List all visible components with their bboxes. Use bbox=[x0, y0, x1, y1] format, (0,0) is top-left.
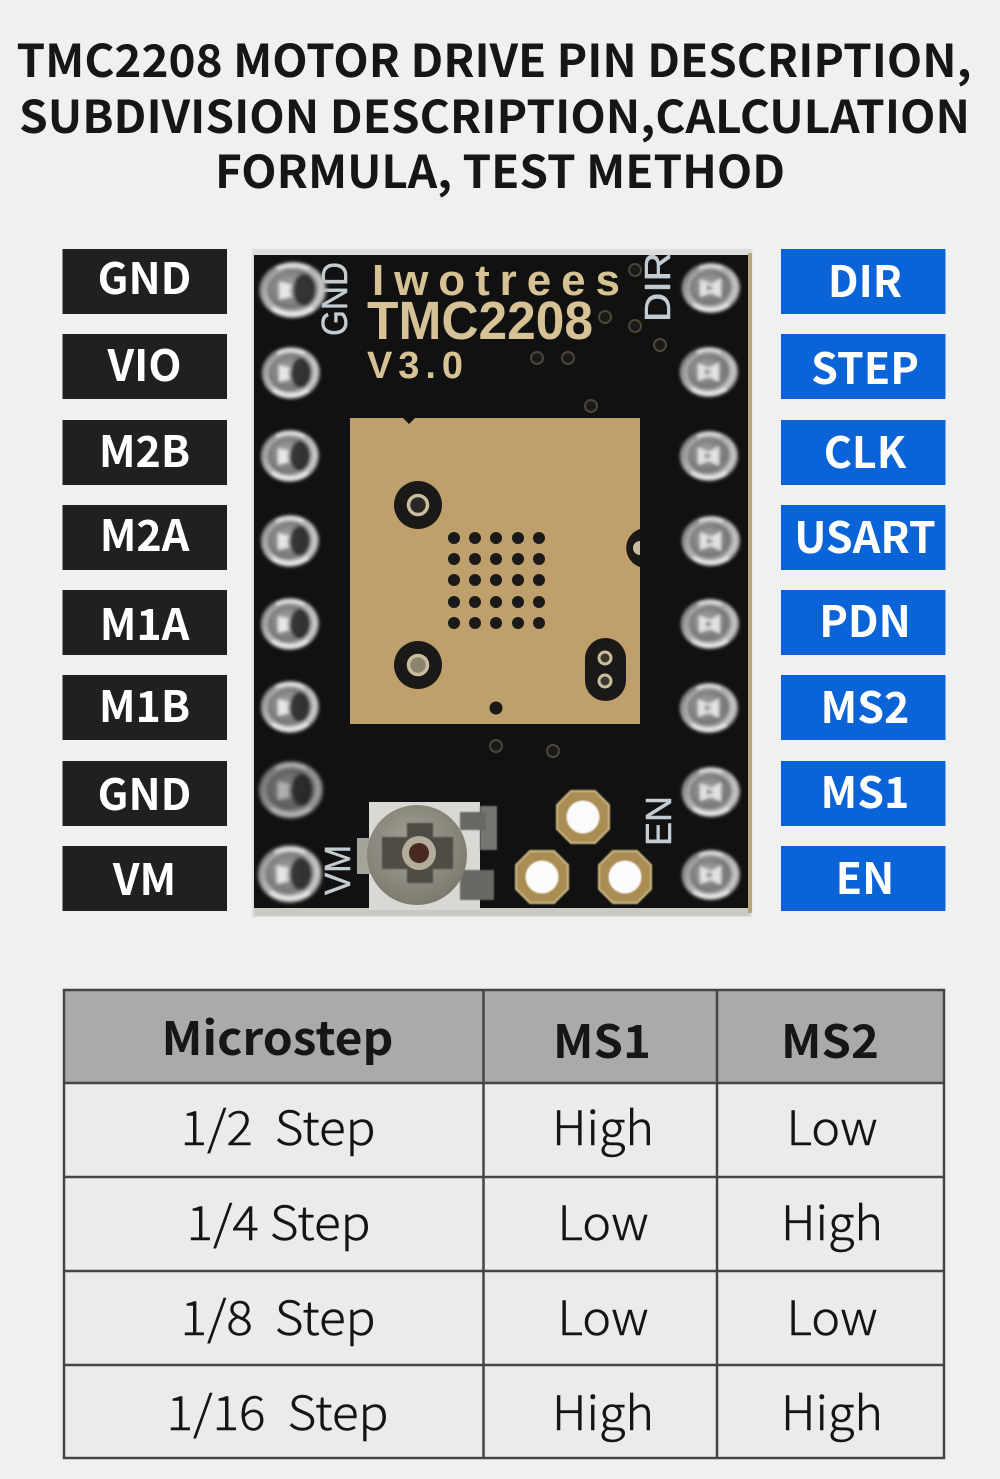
table body: High bbox=[781, 1185, 883, 1254]
right pin labels: MS2 bbox=[821, 674, 909, 736]
right pin labels: PDN bbox=[819, 588, 911, 650]
left pin labels: VM bbox=[112, 846, 176, 908]
board silkscreen text: TMC2208 bbox=[367, 291, 593, 351]
table body: Low bbox=[786, 1090, 878, 1159]
right pin labels: DIR bbox=[828, 248, 902, 310]
table header bbox=[64, 990, 944, 1083]
microstep table bbox=[64, 990, 944, 1458]
potentiometer bbox=[357, 802, 497, 910]
small vias bbox=[490, 264, 666, 757]
right pin labels: MS1 bbox=[821, 759, 909, 821]
left pin labels: GND bbox=[98, 761, 191, 823]
table body: Low bbox=[558, 1185, 648, 1254]
table body: High bbox=[552, 1375, 654, 1444]
left pin labels bbox=[62, 245, 227, 911]
table body: 1/8 Step bbox=[180, 1280, 376, 1349]
table body bbox=[64, 1083, 944, 1458]
right header pins bbox=[680, 263, 740, 900]
title: TMC2208 MOTOR DRIVE PIN DESCRIPTION, bbox=[16, 25, 972, 90]
right pin labels: STEP bbox=[811, 335, 919, 397]
left pin labels: GND bbox=[98, 245, 191, 307]
board silkscreen text: Iwotrees bbox=[372, 256, 620, 305]
table header: Microstep bbox=[162, 1003, 394, 1069]
right pin labels bbox=[781, 248, 946, 911]
through-hole pads bbox=[516, 791, 651, 903]
table body: Low bbox=[786, 1280, 878, 1349]
table body: 1/2 Step bbox=[180, 1090, 376, 1159]
gold thermal pad bbox=[350, 418, 640, 724]
board silkscreen text: GND bbox=[314, 262, 355, 336]
right pin labels: EN bbox=[836, 845, 894, 907]
left header pins bbox=[258, 262, 326, 903]
table body: 1/16 Step bbox=[166, 1375, 388, 1444]
right pin labels: USART bbox=[794, 504, 936, 566]
table body: 1/4 Step bbox=[186, 1185, 370, 1254]
table header: MS1 bbox=[553, 1006, 651, 1072]
board silkscreen text: VM bbox=[317, 845, 358, 895]
title bbox=[16, 25, 972, 201]
table header: MS2 bbox=[781, 1006, 879, 1072]
title: FORMULA, TEST METHOD bbox=[215, 136, 785, 201]
left pin labels: M1A bbox=[100, 591, 190, 653]
left pin labels: M2B bbox=[99, 418, 190, 480]
thermal via grid bbox=[448, 532, 545, 629]
left pin labels: M1B bbox=[99, 673, 190, 735]
left pin labels: M2A bbox=[100, 502, 190, 564]
board silkscreen text: V3.0 bbox=[367, 345, 463, 387]
table body: Low bbox=[558, 1280, 648, 1349]
right pin labels: CLK bbox=[824, 419, 907, 481]
board silkscreen text bbox=[314, 252, 679, 895]
table body: High bbox=[781, 1375, 883, 1444]
title: SUBDIVISION DESCRIPTION,CALCULATION bbox=[19, 81, 970, 146]
circuit board bbox=[252, 249, 752, 917]
board silkscreen text: DIR bbox=[637, 252, 678, 322]
board silkscreen text: EN bbox=[638, 796, 679, 846]
left pin labels: VIO bbox=[107, 332, 181, 394]
table body: High bbox=[552, 1090, 654, 1159]
